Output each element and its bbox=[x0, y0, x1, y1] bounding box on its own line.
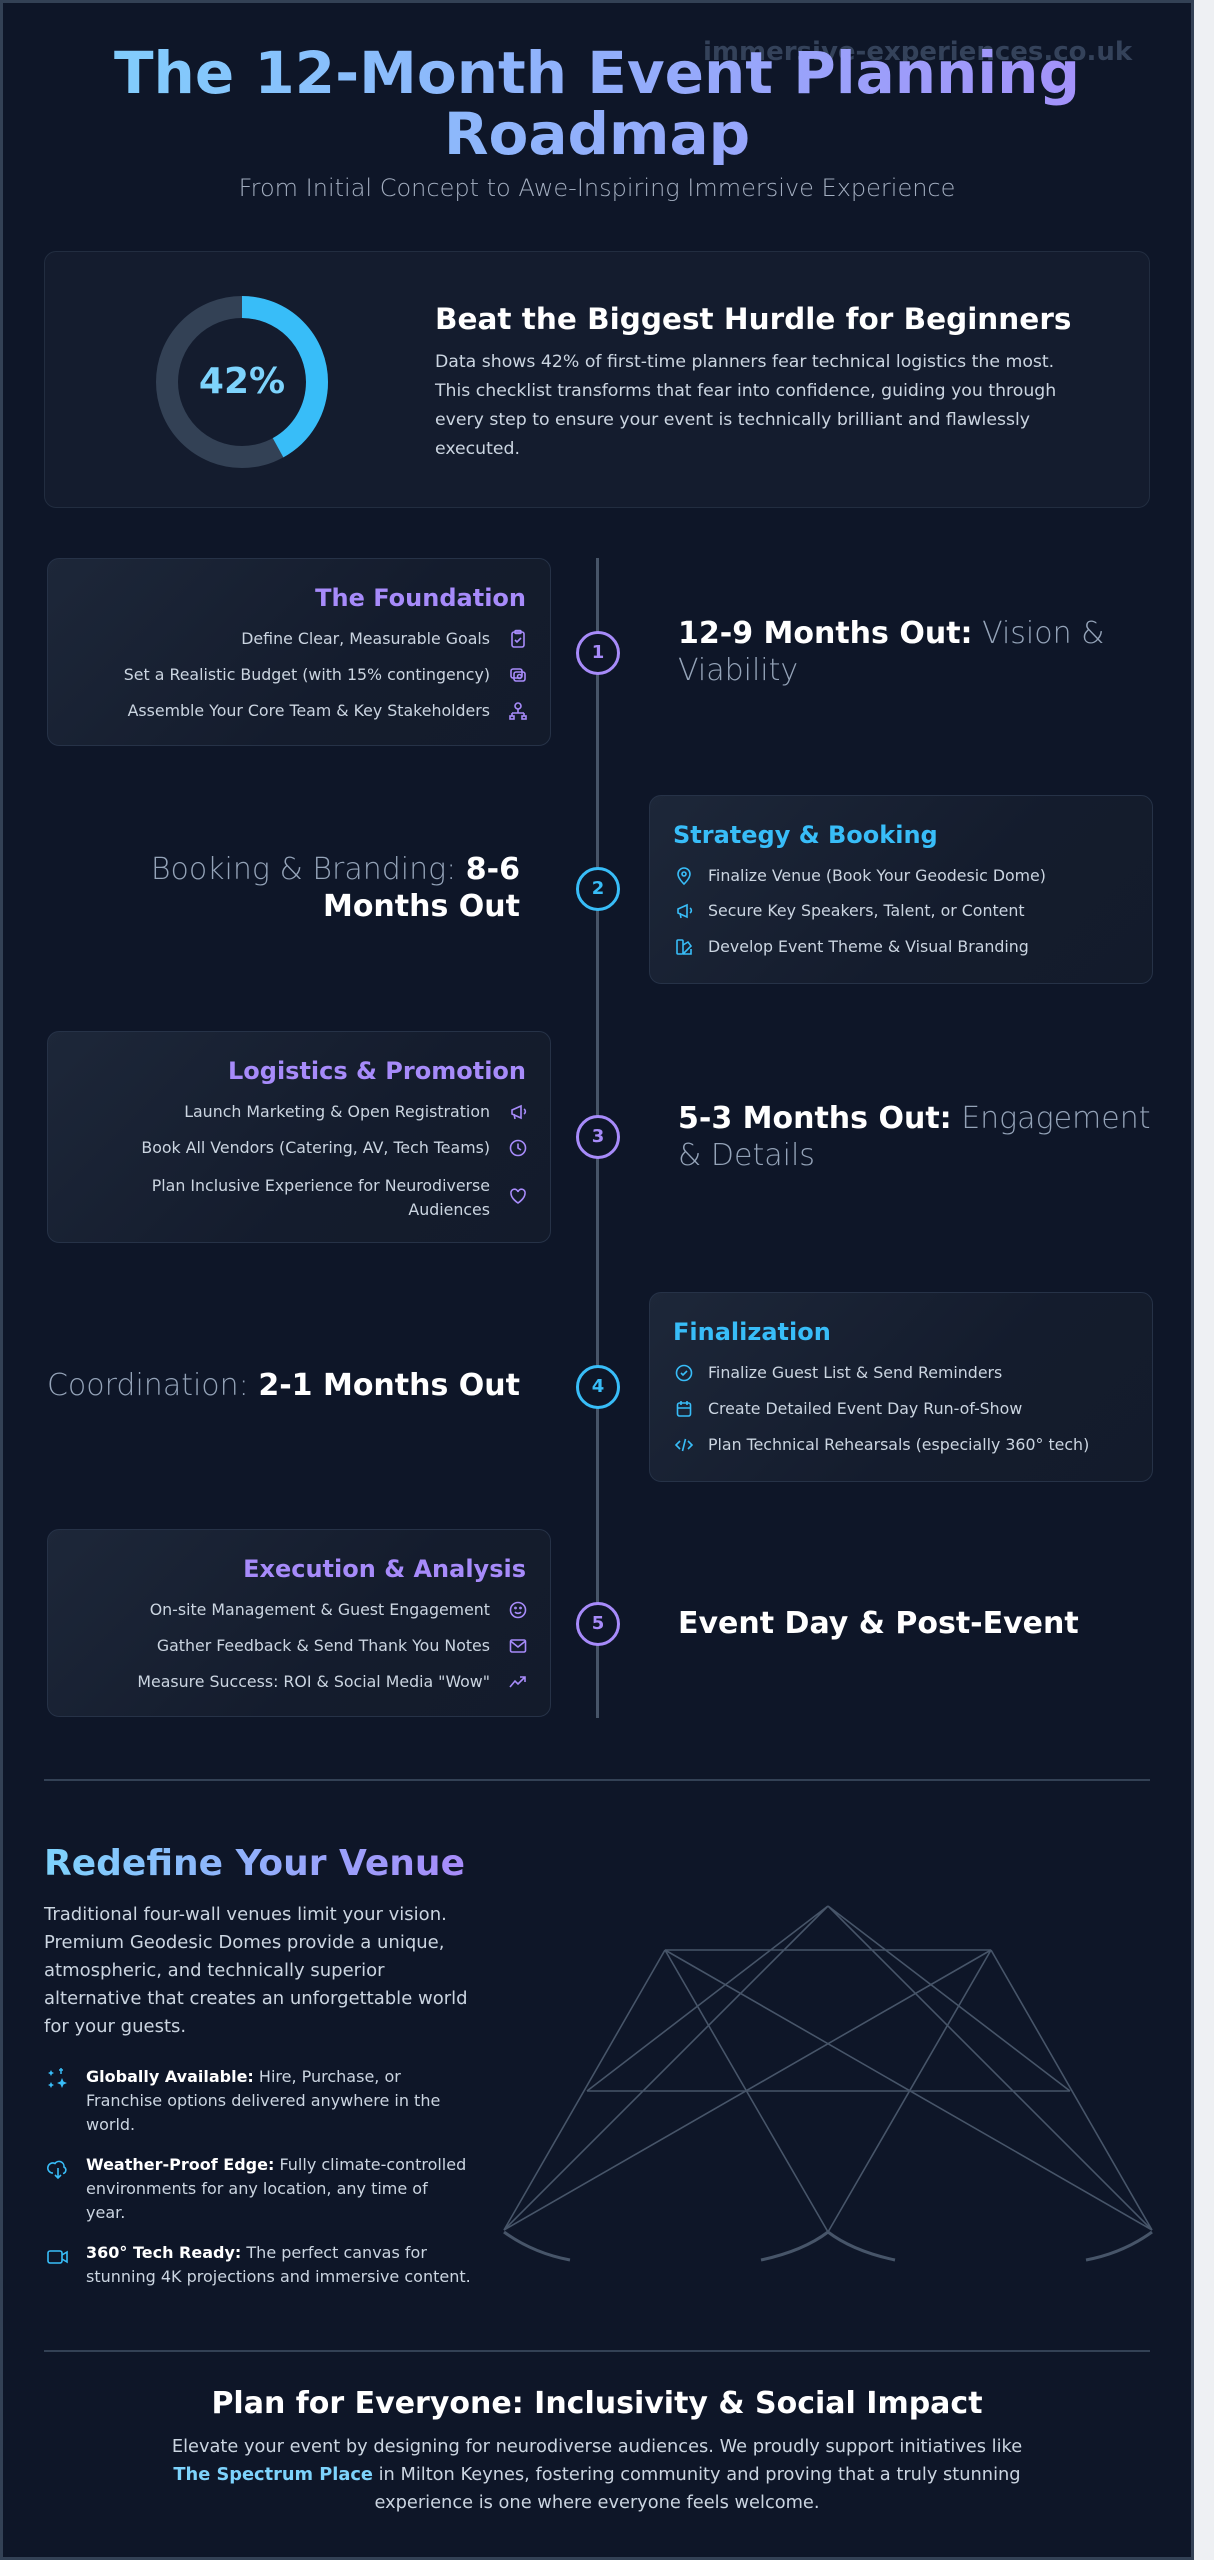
panel: card 4 finalization bbox=[649, 1292, 1153, 1482]
panel: stat card bbox=[44, 251, 1150, 508]
timeline line bbox=[596, 558, 599, 1718]
panel: card 1 foundation: Set a Realistic Budget (with 15% contingency) bbox=[124, 665, 490, 684]
label: step 3: 5-3 Months Out: Engagement & Details bbox=[678, 1101, 1150, 1173]
step 2 marker bbox=[576, 867, 620, 911]
panel: card 2 strategy: Secure Key Speakers, Talent, or Content bbox=[708, 901, 1025, 920]
step 4 marker bbox=[576, 1365, 620, 1409]
icon: cloud download bbox=[47, 2160, 67, 2179]
panel: card 5 execution: Execution & Analysis bbox=[243, 1555, 526, 1583]
step 2 marker: 2 bbox=[592, 878, 604, 899]
panel: card 4 finalization: Plan Technical Rehearsals (especially 360° tech) bbox=[708, 1435, 1089, 1454]
label: step 4: Coordination: 2-1 Months Out bbox=[47, 1368, 520, 1403]
subtitle: From Initial Concept to Awe-Inspiring Immersive Experience bbox=[239, 174, 955, 202]
panel: card 2 strategy: Strategy & Booking bbox=[673, 821, 938, 849]
inclusivity text: Elevate your event by designing for neurodiverse audiences. We proudly support initiatives like The Spectrum Place in Milton Keynes, fostering community and proving that a truly stunning experience is one where everyone feels welcome. bbox=[172, 2436, 1022, 2513]
step 5 marker bbox=[576, 1602, 620, 1646]
panel: card 3 logistics: Plan Inclusive Experience for Neurodiverse Audiences bbox=[152, 1176, 490, 1219]
feature list bbox=[47, 2067, 471, 2286]
label: step 2: Booking & Branding: 8-6 Months Out bbox=[151, 852, 520, 924]
label: step 5: Event Day & Post-Event bbox=[678, 1606, 1079, 1641]
panel: card 2 strategy: Finalize Venue (Book Your Geodesic Dome) bbox=[708, 866, 1046, 885]
feature list: year. bbox=[86, 2203, 125, 2222]
panel: card 4 finalization: Finalization bbox=[673, 1318, 831, 1346]
panel: card 5 execution: On-site Management & Guest Engagement bbox=[150, 1600, 490, 1619]
step 4 marker: 4 bbox=[592, 1376, 604, 1397]
icon: video camera bbox=[47, 2250, 68, 2264]
panel: card 1 foundation: Assemble Your Core Team & Key Stakeholders bbox=[128, 701, 490, 720]
panel: card 4 finalization: Create Detailed Event Day Run-of-Show bbox=[708, 1399, 1022, 1418]
step 1 marker: 1 bbox=[592, 642, 604, 663]
panel: card 5 execution bbox=[47, 1529, 551, 1717]
panel: card 3 logistics: Logistics & Promotion bbox=[228, 1057, 526, 1085]
panel: card 3 logistics bbox=[47, 1031, 551, 1243]
title: The 12-Month Event Planning bbox=[114, 39, 1080, 107]
watermark: immersive-experiences.co.uk bbox=[703, 37, 1132, 67]
panel: card 1 foundation: The Foundation bbox=[315, 584, 526, 612]
feature list: 360° Tech Ready: The perfect canvas for stunning 4K projections and immersive content. bbox=[86, 2243, 471, 2286]
stat text: Data shows 42% of first-time planners fear technical logistics the most. This checklist transforms that fear into confidence, guiding you through every step to ensure your event is technically brilliant and flawlessly executed. bbox=[435, 352, 1056, 459]
venue text: Traditional four-wall venues limit your vision. Premium Geodesic Domes provide a unique, atmospheric, and technically superior alternative that creates an unforgettable world for your guests. bbox=[44, 1904, 468, 2037]
panel: card 4 finalization: Finalize Guest List & Send Reminders bbox=[708, 1363, 1002, 1382]
panel: card 3 logistics: Launch Marketing & Open Registration bbox=[184, 1102, 490, 1121]
panel: card 2 strategy: Develop Event Theme & Visual Branding bbox=[708, 937, 1029, 956]
step 3 marker bbox=[576, 1115, 620, 1159]
step 3 marker: 3 bbox=[592, 1126, 604, 1147]
panel: card 1 foundation bbox=[47, 558, 551, 746]
panel: card 5 execution: Gather Feedback & Send Thank You Notes bbox=[157, 1636, 490, 1655]
panel: card 2 strategy bbox=[649, 795, 1153, 984]
inclusivity heading: Plan for Everyone: Inclusivity & Social Impact bbox=[211, 2386, 983, 2421]
label: step 1: 12-9 Months Out: Vision & Viability bbox=[678, 616, 1105, 688]
panel: card 5 execution: Measure Success: ROI & Social Media "Wow" bbox=[137, 1672, 490, 1691]
panel: card 1 foundation: Define Clear, Measurable Goals bbox=[241, 629, 490, 648]
feature list: Globally Available: Hire, Purchase, or Franchise options delivered anywhere in the world. bbox=[86, 2067, 440, 2134]
donut chart 42%: 42% bbox=[199, 361, 285, 402]
feature list: environments for any location, any time of bbox=[86, 2179, 428, 2198]
title: Roadmap bbox=[444, 100, 750, 168]
step 5 marker: 5 bbox=[592, 1613, 604, 1634]
panel: card 3 logistics: Book All Vendors (Catering, AV, Tech Teams) bbox=[141, 1138, 490, 1157]
icon: sparkles bbox=[48, 2068, 67, 2088]
feature list: Weather-Proof Edge: Fully climate-controlled bbox=[86, 2155, 466, 2174]
step 1 marker bbox=[576, 631, 620, 675]
venue heading: Redefine Your Venue bbox=[44, 1843, 465, 1884]
donut chart 42% bbox=[156, 296, 328, 468]
title bbox=[3, 43, 1191, 165]
stat heading: Beat the Biggest Hurdle for Beginners bbox=[435, 302, 1071, 336]
